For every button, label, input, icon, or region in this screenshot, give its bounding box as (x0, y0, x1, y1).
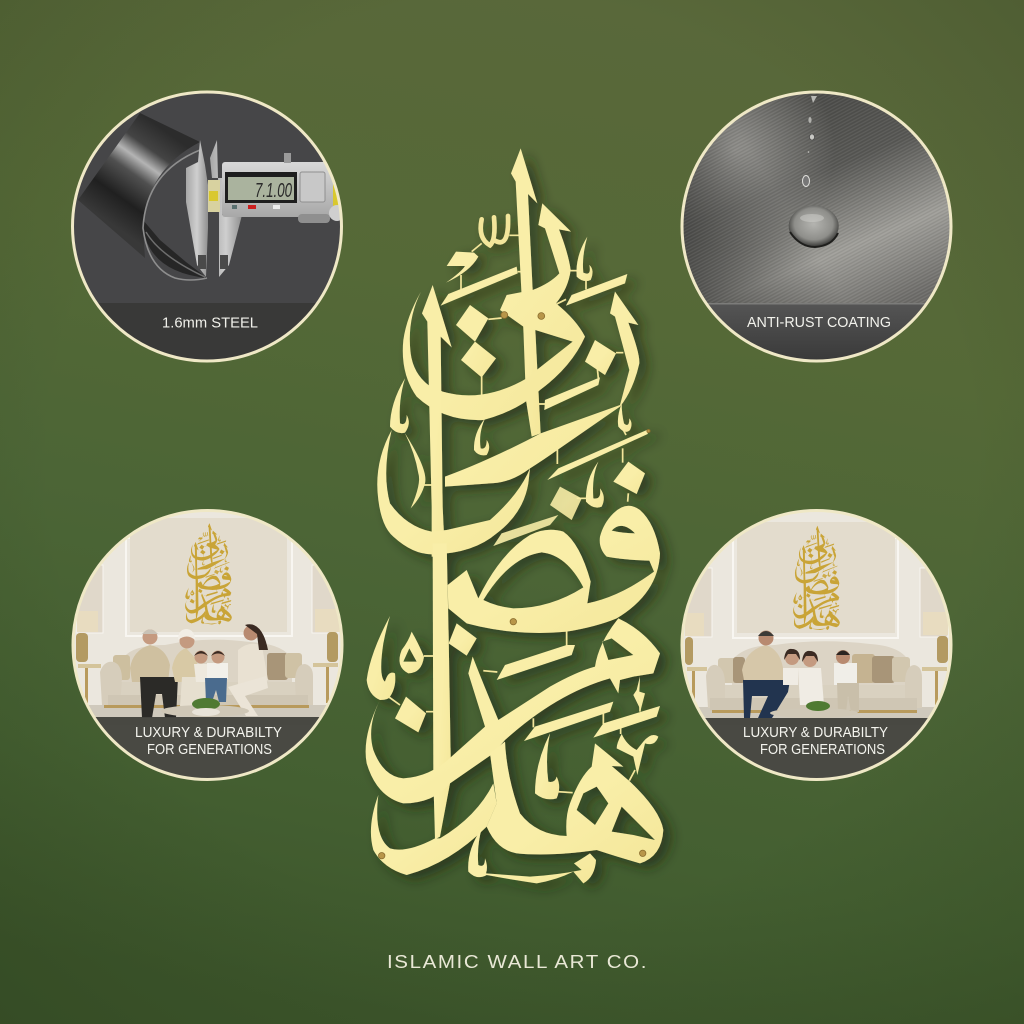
coffee table (161, 698, 249, 717)
coffee table (770, 701, 858, 715)
family figures (742, 630, 859, 718)
sofa (100, 640, 313, 708)
label band: ANTI-RUST COATING (747, 315, 891, 331)
sofa (706, 641, 922, 713)
family figures (130, 624, 268, 718)
steel tube (78, 113, 207, 280)
water droplet (789, 96, 839, 247)
label band (98, 303, 316, 360)
panel: family living room right (684, 512, 950, 778)
mini calligraphy (793, 526, 840, 630)
label band: LUXURY & DURABILTY (743, 725, 888, 741)
mounting screws (378, 312, 650, 859)
brand footer: ISLAMIC WALL ART CO. (387, 952, 648, 972)
ring: steel (72, 92, 342, 361)
label band (708, 303, 925, 360)
caliper readout: 7.1.00 (255, 180, 292, 202)
label band: 1.6mm STEEL (162, 316, 258, 332)
label band: LUXURY & DURABILTY (135, 725, 282, 741)
ring: right room (682, 510, 951, 780)
ring: left room (73, 510, 342, 780)
panel: 1.6mm steel (70, 90, 345, 368)
gold calligraphy wall art (366, 148, 663, 883)
ring: coating (682, 92, 951, 361)
label band (96, 717, 320, 778)
label band: FOR GENERATIONS (760, 742, 885, 758)
label band: FOR GENERATIONS (147, 742, 272, 758)
lamps (76, 609, 340, 704)
caliper (186, 140, 345, 277)
lamps (685, 612, 948, 705)
panel: family living room left (74, 512, 340, 778)
label band (705, 718, 928, 778)
panel: anti-rust coating (680, 90, 955, 368)
mini calligraphy (185, 523, 232, 624)
